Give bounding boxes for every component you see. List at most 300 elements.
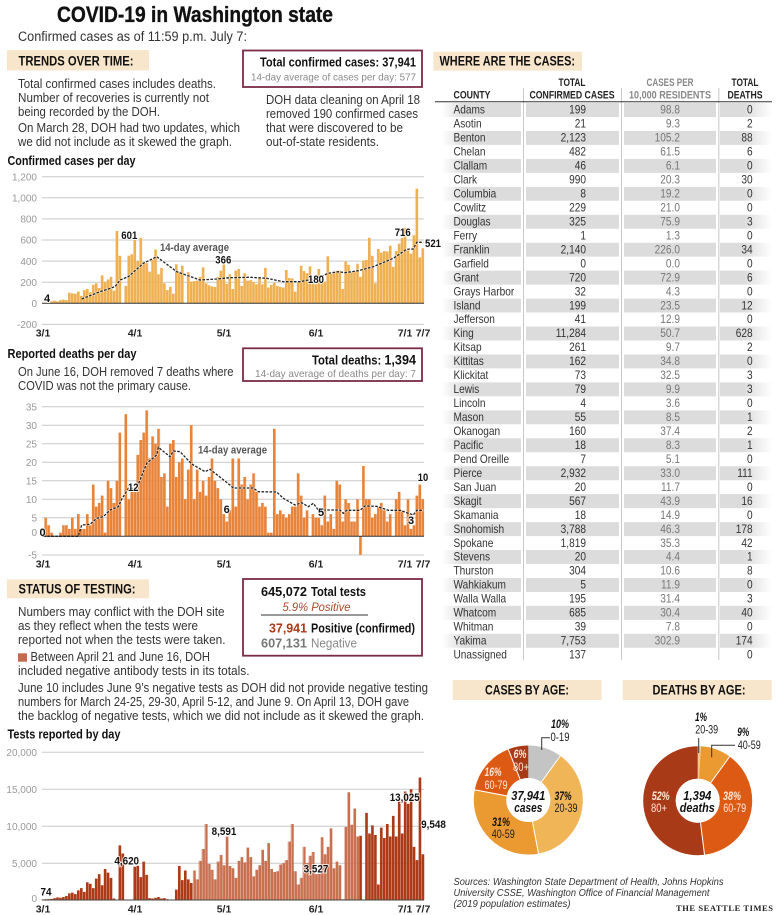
text: testing notes: June 10 includes June 9’s negative tests as DOH did not provide negative testing [18,681,428,695]
column: county: Grays Harbor [453,286,515,298]
bar chart: tests reported by day: 74 [40,886,52,898]
table header: 10,000 RESIDENTS [629,90,711,102]
column: cases per 10,000 residents: 35.3 [660,537,680,550]
column: cases per 10,000 residents: 4.4 [666,551,680,564]
bar chart: tests reported by day: 9,548 [421,819,446,831]
text: testing notes: as they reflect when the tests were [18,619,198,633]
table header: CASES PER [646,77,694,89]
column: total confirmed cases: 5 [580,579,586,592]
column: county: Thurston [453,565,493,578]
column: county: Grant [453,272,479,285]
bar chart: reported deaths per day: 7/1 [398,558,412,570]
column: county: Skamania [453,509,499,522]
credit: the seattle times: THE SEATTLE TIMES [676,903,773,913]
column: total deaths: 6 [747,272,753,285]
callout: total deaths [243,348,422,381]
column: county: Island [453,300,481,312]
bar chart: reported deaths per day: 12 [128,482,139,494]
bar chart: tests reported by day: 4,620 [114,856,139,868]
heading: cases by age: CASES BY AGE: [485,682,569,698]
callout: testing totals: 37,941 [269,620,307,636]
donut chart: cases by age: 20-39 [554,803,578,815]
text: data cleaning note [266,93,420,149]
chart heading: reported deaths: Reported deaths per day [8,347,137,361]
text: testing notes: reported not when the tests were taken. [18,633,226,647]
donut chart: cases by age: 37% [554,791,572,803]
column: total deaths: 0 [747,188,753,201]
column: cases per 10,000 residents: 7.8 [666,621,680,634]
bar chart: reported deaths per day: 5/1 [217,558,231,570]
column: total deaths: 1 [747,439,753,452]
callout: testing totals: Positive (confirmed) [311,622,415,636]
text: deaths note: COVID was not the primary cause. [18,379,191,393]
column: total deaths: 3 [747,593,753,606]
column: total confirmed cases: 4 [580,398,586,410]
column: county: Mason [453,411,484,424]
callout: total deaths: Total deaths: 1,394 [312,352,416,368]
column: cases per 10,000 residents: 4.3 [666,286,680,298]
bar chart: reported deaths per day: 20 [26,458,37,469]
column: county: Snohomish [453,523,504,536]
column: county: Garfield [453,258,489,271]
callout: testing totals [243,579,422,656]
column: cases per 10,000 residents: 98.8 [660,104,680,117]
donut chart: deaths by age: 38% [723,791,741,803]
column: total deaths: 0 [747,453,753,466]
bar chart: confirmed cases per day: 1,200 [12,172,37,184]
column: total confirmed cases: 1 [580,230,586,243]
column: county: Adams [453,104,486,117]
callout: testing totals: Negative [311,636,357,650]
column: total deaths: 0 [747,202,753,215]
bar chart: tests reported by day: 8,591 [212,826,236,838]
bar chart: tests reported by day: 3,527 [304,864,328,876]
donut chart: deaths by age: 9% [737,727,749,739]
column: total confirmed cases: 2,932 [561,467,586,480]
bar chart: confirmed cases per day: 5/1 [217,328,231,340]
column: total confirmed cases: 162 [569,356,586,368]
donut chart: deaths by age: 60-79 [723,803,746,815]
column: total deaths: 0 [747,104,753,117]
bar chart: reported deaths per day: 15 [26,476,37,488]
column: total confirmed cases: 79 [575,384,586,396]
column: cases per 10,000 residents: 19.2 [660,188,680,201]
column: county: Whitman [453,621,493,634]
callout: total deaths: 14-day average of deaths per day: 7 [255,368,416,380]
column: total confirmed cases: 7 [580,453,586,466]
column: county: Jefferson [453,314,495,326]
sources: (2019 population estimates) [454,898,570,910]
donut chart: deaths by age: 1,394 [683,789,711,803]
column: cases per 10,000 residents: 226.0 [655,244,680,257]
text: testing notes: Between April 21 and June 16, DOH [30,650,210,664]
column: total deaths: 0 [747,286,753,298]
column: total deaths: 0 [747,160,753,173]
sources: Sources: Washington State Department of Health, Johns Hopkins [454,876,724,888]
bar chart: confirmed cases per day: 400 [20,257,37,268]
column: total confirmed cases: 3,788 [561,523,586,536]
column: cases per 10,000 residents: 12.9 [660,314,680,326]
table header: DEATHS [728,90,762,102]
bar chart: reported deaths per day: 6 [224,504,230,516]
heading: where are the cases: WHERE ARE THE CASES: [440,52,575,68]
column: total deaths: 0 [747,509,753,522]
column: cases per 10,000 residents: 10.6 [660,565,680,578]
column: county: King [453,328,474,340]
column: cases per 10,000 residents: 31.4 [660,593,680,606]
column: total confirmed cases: 32 [575,286,586,298]
bar chart: confirmed cases per day: 521 [425,238,441,250]
column: total deaths: 3 [747,384,753,396]
column: total deaths: 0 [747,230,753,243]
text: trends notes left: Total confirmed cases includes deaths. [18,77,216,91]
bar chart: reported deaths per day: 30 [26,421,37,432]
donut chart: cases by age: 37,941 [511,789,545,803]
column: total confirmed cases: 567 [569,495,586,508]
column: total deaths: 0 [747,356,753,368]
column: county: Clallam [453,160,487,173]
text: deaths note: On June 16, DOH removed 7 deaths where [18,365,234,379]
donut chart: cases by age: 40-59 [492,829,515,841]
table header: TOTAL [732,77,759,89]
callout: total confirmed cases [243,50,422,87]
column: total deaths: 3 [747,370,753,382]
column: total deaths: 0 [747,258,753,271]
column: cases per 10,000 residents: 5.1 [666,453,680,466]
column: total deaths: 88 [741,132,753,145]
bar chart: reported deaths per day: 10 [26,495,37,506]
donut chart: deaths by age: 1% [695,712,707,724]
column: total confirmed cases: 7,753 [561,635,586,648]
bar chart: tests reported by day: 13,025 [390,792,420,804]
column: county: Walla Walla [453,593,507,606]
text: testing notes [18,605,428,723]
donut chart: deaths by age [651,712,761,855]
text: data cleaning note: DOH data cleaning on April 18 [266,93,420,107]
bar chart: tests reported by day: 0 [31,894,37,905]
heading: where are the cases [433,52,582,71]
callout: testing totals: 5.9% Positive [282,600,351,614]
column: total deaths: 3 [747,216,753,229]
column: total deaths: 34 [741,244,753,257]
bar chart: confirmed cases per day: 7/7 [416,328,430,340]
column: cases per 10,000 residents: 21.0 [660,202,680,215]
column: total confirmed cases: 325 [569,216,586,229]
bar chart: tests reported by day: 15,000 [6,785,37,796]
sources [454,876,724,910]
bar chart: confirmed cases per day: 7/1 [398,328,412,340]
column: total confirmed cases: 73 [575,370,586,382]
bar chart: confirmed cases per day: 601 [121,230,137,242]
column: county: Benton [453,132,486,145]
bar chart: reported deaths per day: 3/1 [36,558,50,570]
column: county: Spokane [453,537,493,550]
column: total confirmed cases: 1,819 [561,537,586,550]
column: county: Kittitas [453,356,484,368]
column: total confirmed cases: 720 [569,272,586,285]
column: cases per 10,000 residents: 8.3 [666,439,680,452]
column: cases per 10,000 residents: 11.9 [661,579,680,592]
column: cases per 10,000 residents: 302.9 [655,635,680,648]
column: county: Clark [453,174,478,187]
bar chart: tests reported by day: 10,000 [6,822,37,833]
donut chart: cases by age: 60-79 [484,780,508,792]
column: total confirmed cases: 137 [569,649,586,662]
column: total confirmed cases: 0 [580,258,586,271]
column: cases per 10,000 residents: 37.4 [660,425,680,438]
text: trends notes left: being recorded by the DOH. [18,105,160,119]
column: county: Yakima [453,635,487,648]
callout: testing totals: Total tests [311,585,366,599]
heading: deaths by age: DEATHS BY AGE: [652,682,746,698]
column: total confirmed cases: 39 [575,621,586,634]
column: total deaths: 40 [741,607,753,620]
heading: trends over time [7,50,149,70]
bar chart: reported deaths per day: 5 [318,507,324,519]
column: county: Skagit [453,495,482,508]
column: total deaths: 2 [747,118,753,131]
column: total confirmed cases: 18 [575,509,586,522]
column: total confirmed cases: 8 [580,188,586,201]
column: county: Ferry [453,230,478,243]
text: data cleaning note: that were discovered to be [266,121,403,135]
column: total deaths: 0 [747,579,753,592]
column: cases per 10,000 residents: 20.3 [660,174,680,187]
text: data cleaning note: out-of-state residents. [266,135,379,149]
column: cases per 10,000 residents: 9.9 [666,384,680,396]
bar chart: reported deaths per day: 14-day average [198,444,267,456]
column: total deaths: 628 [736,328,753,340]
column: total deaths: 0 [747,314,753,326]
column: county: Kitsap [453,342,482,354]
column: county: Klickitat [453,370,488,382]
column: cases per 10,000 residents: 9.7 [666,342,680,354]
text: deaths note [18,365,234,393]
column: total confirmed cases: 160 [569,425,586,438]
heading: cases by age [453,680,602,700]
table header [454,77,762,102]
column: county: Wahkiakum [453,579,506,592]
column: total confirmed cases: 21 [575,118,586,131]
text: testing notes: included negative antibody tests in its totals. [18,664,250,678]
column: total confirmed cases: 20 [575,481,586,494]
donut chart: cases by age: 6% [514,749,526,761]
text: trends notes left: we did not include as it skewed the graph. [17,135,232,149]
bar chart: reported deaths per day: 35 [26,402,37,414]
column: total confirmed cases: 2,123 [561,132,586,145]
chart heading: tests: Tests reported by day [8,728,121,742]
bar chart: confirmed cases per day: 800 [20,214,37,226]
column: total confirmed cases: 229 [569,202,586,215]
bar chart: confirmed cases per day: 4 [44,293,51,305]
column: cases per 10,000 residents: 33.0 [660,467,680,480]
donut chart: deaths by age: 20-39 [695,724,718,736]
column: county: Asotin [453,118,482,131]
heading: deaths by age [623,680,772,700]
column: total confirmed cases: 199 [569,104,586,117]
column: county: Unassigned [453,649,507,662]
bar chart: confirmed cases per day: -200 [17,320,37,331]
text: trends notes left: On March 28, DOH had two updates, which [18,121,240,135]
column: cases per 10,000 residents: 50.7 [660,328,680,340]
column: total confirmed cases: 685 [569,607,586,620]
column: total deaths: 111 [737,467,753,480]
text: testing notes: numbers for March 24-25, 29-30, April 5-12, and June 9. On April 13, DOH gave [18,695,409,709]
text: trends notes left [17,77,240,149]
table header: TOTAL [558,77,586,89]
column: cases per 10,000 residents: 1.3 [666,230,680,243]
column: county: Okanogan [453,425,500,438]
donut chart: cases by age: cases [514,801,542,815]
column: county: Pacific [453,439,484,452]
column: total deaths: 0 [747,481,753,494]
donut chart: deaths by age: deaths [680,801,715,815]
column: cases per 10,000 residents: 34.8 [660,356,680,368]
callout: total confirmed cases: 14-day average of cases per day: 577 [251,72,416,84]
text: trends notes left: Number of recoveries is currently not [18,91,209,105]
column: total deaths: 8 [747,565,753,578]
column: cases per 10,000 residents: 75.9 [660,216,680,229]
bar chart: tests reported by day: 20,000 [6,748,37,759]
column: cases per 10,000 residents: 6.1 [666,160,680,173]
column: cases per 10,000 residents: 32.5 [660,370,680,382]
bar chart: confirmed cases per day: 200 [20,278,37,289]
column: cases per 10,000 residents: 46.3 [660,523,680,536]
column: total deaths: 1 [747,551,753,564]
column: cases per 10,000 residents: 30.4 [660,607,680,620]
column: county: Lincoln [453,398,486,410]
column: total confirmed cases: 18 [575,439,586,452]
column: total deaths: 30 [741,174,753,187]
bar chart: confirmed cases per day: 14-day average [160,242,229,254]
column: county: Whatcom [453,607,496,620]
bar chart: reported deaths per day: -5 [28,550,37,562]
callout: testing totals: 607,131 [261,636,307,650]
donut chart: deaths by age: 52% [652,791,670,803]
column: county: Cowlitz [453,202,486,215]
donut chart: cases by age: 10% [551,719,569,731]
column: county: Franklin [453,244,489,257]
bar chart: reported deaths per day: 4/1 [128,558,142,570]
column: cases per 10,000 residents: 72.9 [660,272,680,285]
subtitle: Confirmed cases as of 11:59 p.m. July 7: [18,29,247,44]
table header: CONFIRMED CASES [530,90,614,102]
column: total confirmed cases: 482 [569,146,586,159]
callout: testing totals: 645,072 [261,584,307,599]
column: county: Lewis [453,384,480,396]
bar chart: confirmed cases per day: 0 [31,299,37,310]
bar chart: reported deaths per day: 10 [418,472,428,484]
column: total deaths: 12 [741,300,753,312]
heading: trends over time: TRENDS OVER TIME: [18,52,134,68]
column: total confirmed cases: 199 [569,300,586,312]
column: total confirmed cases: 41 [575,314,586,326]
column: cases per 10,000 residents: 11.7 [661,481,680,494]
column: county: Pend Oreille [453,453,509,466]
column: total confirmed cases: 55 [575,411,586,424]
table header: COUNTY [454,90,491,102]
bar chart: reported deaths per day: 6/1 [309,558,323,570]
column: cases per 10,000 residents: 43.9 [660,495,680,508]
column: cases per 10,000 residents: 23.5 [660,300,680,312]
column: county: San Juan [453,481,496,494]
bar chart: confirmed cases per day: 4/1 [128,328,142,340]
bar chart: reported deaths per day: 3 [408,515,414,527]
column: total confirmed cases: 261 [569,342,586,354]
column: total confirmed cases: 195 [569,593,586,606]
bar chart: reported deaths per day: 7/7 [416,558,430,570]
column: total deaths: 1 [747,411,753,424]
donut chart: cases by age: 80+ [513,762,529,774]
column: county: Pierce [453,467,482,480]
column: total deaths: 0 [747,649,753,662]
sources: University CSSE, Washington Office of Financial Management [454,887,710,899]
text: testing notes: the backlog of negative tests, which we did not include as it skewed the graph. [18,709,424,723]
column: total deaths: 178 [736,523,753,536]
column: total deaths: 6 [747,146,753,159]
bar chart: reported deaths per day: 25 [26,440,37,450]
column: total confirmed cases: 304 [569,565,586,578]
column: total confirmed cases: 990 [569,174,586,187]
bar chart: confirmed cases per day: 600 [20,236,37,247]
text: testing notes: Numbers may conflict with the DOH site [18,605,225,619]
donut chart: cases by age: 0-19 [550,732,570,744]
bar chart: reported deaths per day: 5 [31,514,37,524]
column: total confirmed cases: 20 [575,551,586,564]
column: total deaths: 174 [736,635,753,648]
bar chart: confirmed cases per day: 6/1 [309,328,323,340]
text: data cleaning note: removed 190 confirmed cases [266,107,418,121]
column: total deaths: 2 [747,342,753,354]
heading: status of testing: STATUS OF TESTING: [18,580,136,596]
chart heading: confirmed cases: Confirmed cases per day [8,154,136,168]
bar chart: reported deaths per day: 0 [39,527,46,539]
bar chart: tests reported by day [6,748,446,915]
column: county: Douglas [453,216,491,229]
callout: total confirmed cases: Total confirmed cases: 37,941 [260,56,416,70]
column: county: Stevens [453,551,491,564]
column: cases per 10,000 residents: 61.5 [660,146,680,159]
column: county: Columbia [453,188,497,201]
column: total confirmed cases: 46 [575,160,586,173]
title: COVID-19 in Washington state [57,2,333,27]
bar chart: confirmed cases per day: 716 [395,227,411,239]
bar chart: confirmed cases per day [12,172,441,340]
column: total deaths: 2 [747,425,753,438]
column: total deaths: 16 [741,495,753,508]
column: total confirmed cases: 11,284 [556,328,586,340]
column: county: Chelan [453,146,486,159]
donut chart: cases by age: 31% [492,817,510,829]
bar chart: confirmed cases per day: 1,000 [12,194,37,204]
bar chart: reported deaths per day: 0 [31,528,37,539]
table: cases by county [435,77,772,662]
donut chart: cases by age [474,719,578,854]
bar chart: confirmed cases per day: 366 [215,254,231,266]
donut chart: deaths by age: 40-59 [738,740,761,752]
column: cases per 10,000 residents: 14.9 [660,509,680,522]
column: cases per 10,000 residents: 3.6 [666,398,680,410]
bar chart: tests reported by day: 5,000 [12,859,37,870]
column: cases per 10,000 residents: 9.3 [666,118,680,131]
column: cases per 10,000 residents: 105.2 [655,132,680,145]
column: total deaths: 42 [741,537,753,550]
donut chart: cases by age: 16% [484,767,502,779]
bar chart: confirmed cases per day: 3/1 [36,328,50,340]
donut chart: deaths by age: 80+ [651,803,667,815]
column: cases per 10,000 residents: 8.5 [666,411,680,424]
column: total confirmed cases: 2,140 [561,244,586,257]
